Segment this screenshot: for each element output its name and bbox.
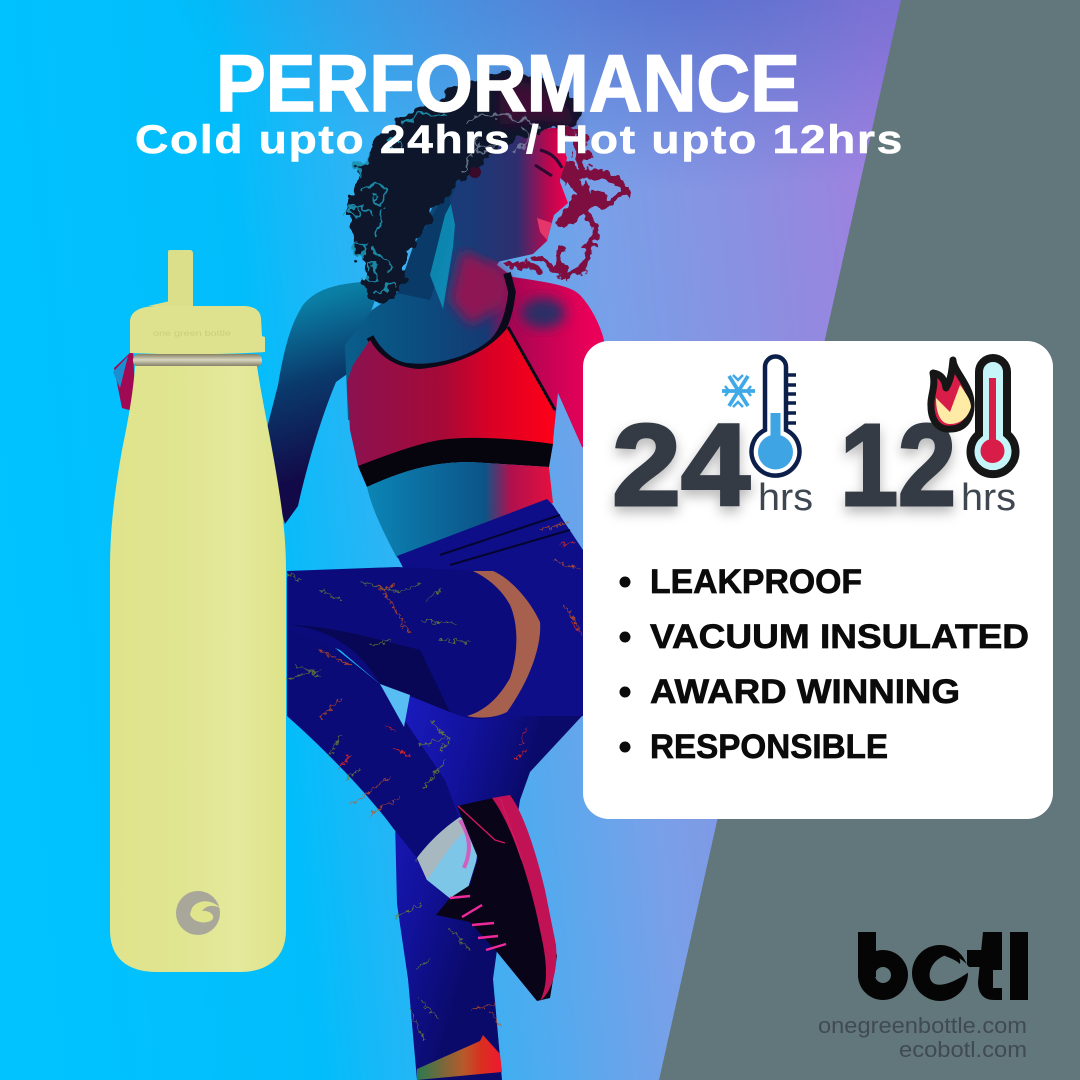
sky gap between legs xyxy=(380,684,410,727)
hair curls left xyxy=(342,114,445,295)
red bra xyxy=(347,327,555,466)
bottle logo xyxy=(176,891,220,935)
bullet: award winning: AWARD WINNING xyxy=(650,673,960,711)
hair crown tint xyxy=(500,80,575,125)
ear xyxy=(469,166,481,178)
right arm and torso skin xyxy=(345,170,604,450)
bullet: responsible: RESPONSIBLE xyxy=(650,728,888,766)
left arm xyxy=(266,282,375,524)
grey diagonal panel xyxy=(659,0,1080,1080)
bottom leg band xyxy=(417,1035,502,1080)
stat: 12 hrs: hrs xyxy=(961,477,1016,519)
bottle body xyxy=(110,366,286,972)
standing leg xyxy=(395,640,582,1080)
icon: cold thermometer with snowflake xyxy=(722,356,800,476)
neck left shadow xyxy=(397,175,457,300)
athlete figure xyxy=(113,74,625,1080)
website: onegreenbottle.com: onegreenbottle.com xyxy=(818,1013,1027,1038)
straw spout xyxy=(168,250,193,306)
shaded under-thigh xyxy=(287,625,450,712)
sock xyxy=(417,817,477,900)
hand behind bottle xyxy=(114,350,136,412)
bra black band xyxy=(358,438,553,487)
stat: 12 hrs: 12 xyxy=(840,400,956,530)
bent lower leg xyxy=(287,620,462,858)
bullet: leakproof: LEAKPROOF xyxy=(650,563,862,601)
legging cracks xyxy=(285,522,582,1040)
brand logo: botl xyxy=(858,932,1028,1001)
orange band xyxy=(467,571,540,718)
hair right curls xyxy=(505,130,625,282)
thigh xyxy=(287,567,540,719)
product bottle xyxy=(110,250,286,972)
stat: 24 hrs: 24 xyxy=(612,400,750,530)
website: ecobotl.com: ecobotl.com xyxy=(899,1037,1027,1062)
stat: 24 hrs: hrs xyxy=(758,477,813,519)
icon: hot thermometer with flame xyxy=(931,358,1016,474)
legging waist stripes xyxy=(440,515,570,565)
hair mass xyxy=(348,74,578,307)
neck highlight xyxy=(430,190,458,309)
lid engraved text: one green bottle xyxy=(153,329,232,338)
bullet: vacuum insulated: VACUUM INSULATED xyxy=(650,618,1029,656)
shoulder shadow xyxy=(521,298,565,328)
hair curls light xyxy=(460,115,540,170)
shoe xyxy=(436,795,557,1001)
title: PERFORMANCE xyxy=(216,39,800,129)
face xyxy=(450,128,568,262)
hip and leggings xyxy=(397,499,583,716)
benefit list xyxy=(620,563,1029,766)
black bra straps xyxy=(370,273,512,367)
info card xyxy=(583,341,1053,819)
steel ring xyxy=(133,354,262,367)
lid xyxy=(130,306,265,354)
lips and eye xyxy=(537,218,552,240)
subtitle: Cold upto 24hrs / Hot upto 12hrs xyxy=(135,118,904,162)
crimson under jaw xyxy=(450,250,510,325)
stat: 24 hrs xyxy=(612,400,813,530)
midriff xyxy=(367,462,553,558)
